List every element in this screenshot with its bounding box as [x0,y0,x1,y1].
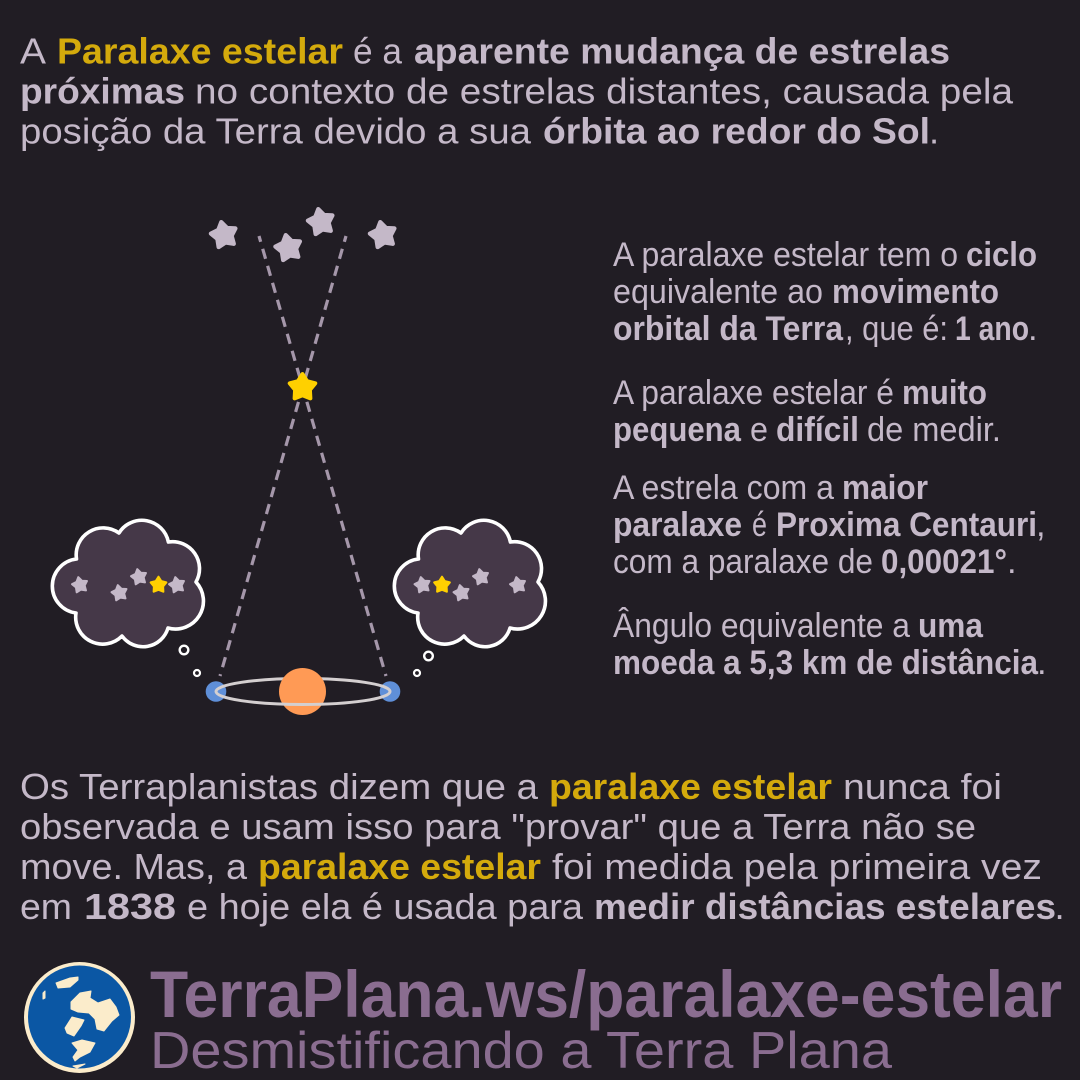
Earth orbit back half [216,679,390,692]
heading: definition of stellar parallax: Paralaxe estelar [57,30,343,72]
text block: flat earth claim: Os Terraplanistas dizem que a [20,766,539,807]
thought cloud left [52,520,203,647]
heading: definition of stellar parallax: . [929,110,939,152]
text block: cycle: orbital da Terra [613,310,844,348]
text block: coin comparison: uma [918,607,984,645]
heading: definition of stellar parallax: posição da Terra devido a sua [20,110,532,152]
text block: small and hard to measure: pequena [613,411,742,449]
near star [290,374,315,398]
text block: small and hard to measure [613,374,1001,449]
text block: Proxima Centauri: é [752,506,767,544]
text block: flat earth claim: e hoje ela é usada para [187,886,584,927]
text block: cycle: . [1028,310,1038,348]
text block: flat earth claim: paralaxe estelar [258,846,541,887]
text block: flat earth claim: paralaxe estelar [549,766,832,807]
text block: coin comparison: moeda a 5,3 km de distância [613,644,1039,682]
thought bubbles right [414,652,433,676]
text block: coin comparison [613,606,1047,682]
text block: flat earth claim: move. Mas, a [20,846,248,887]
logo: flat earth globe [24,962,135,1073]
text block: cycle: ciclo [966,236,1037,274]
heading: definition of stellar parallax [20,30,1014,152]
text block: coin comparison: Ângulo equivalente a [613,606,911,645]
text block: flat earth claim: 1838 [84,886,176,927]
text block: cycle: movimento [832,273,999,311]
heading: definition of stellar parallax: A [20,30,47,72]
heading: definition of stellar parallax: é a [353,30,403,72]
text block: cycle [613,236,1038,348]
diagram: parallax geometry [52,206,545,715]
text block: cycle: 1 ano [955,310,1029,348]
thought bubbles left [180,646,200,676]
heading: definition of stellar parallax: aparente mudança de estrelas [414,30,950,72]
text block: cycle: A paralaxe estelar tem o [613,236,958,274]
text block: cycle: equivalente ao [613,273,823,311]
footer tagline: Desmistificando a Terra Plana [150,1022,892,1080]
text block: small and hard to measure: A paralaxe estelar é [613,374,894,412]
Earth right position [380,681,400,702]
text block: Proxima Centauri: . [1007,543,1017,581]
distant stars [209,206,397,261]
text block: Proxima Centauri: A estrela com a [613,469,835,507]
text block: cycle: , que é: [845,310,948,348]
heading: definition of stellar parallax: próximas [20,70,185,112]
Earth left position [206,681,226,702]
text block: Proxima Centauri: maior [842,469,928,507]
text block: small and hard to measure: e [750,411,768,449]
Sun [279,668,326,715]
text block: flat earth claim: foi medida pela primeira vez [552,846,1042,887]
text block: Proxima Centauri: paralaxe [613,506,742,544]
text block: flat earth claim: medir distâncias estelares [594,886,1056,927]
text block: small and hard to measure: muito [902,374,987,412]
text block: Proxima Centauri [613,469,1046,581]
text block: Proxima Centauri: Proxima Centauri [776,506,1037,544]
text block: flat earth claim: observada e usam isso para "provar" que a Terra não se [20,806,976,847]
text block: small and hard to measure: difícil [776,411,859,449]
text block: flat earth claim: em [20,886,72,927]
thought cloud right [394,520,545,647]
text block: small and hard to measure: de medir. [867,411,1001,449]
text block: flat earth claim: nunca foi [843,766,1002,807]
Earth orbit front half [216,692,390,705]
heading: definition of stellar parallax: órbita ao redor do Sol [543,110,930,152]
text block: Proxima Centauri: , [1036,506,1046,544]
text block: coin comparison: . [1037,644,1047,682]
text block: flat earth claim: . [1054,886,1065,927]
heading: definition of stellar parallax: no contexto de estrelas distantes, causada pela [195,70,1014,112]
text block: flat earth claim [20,766,1065,927]
text block: Proxima Centauri: com a paralaxe de [613,543,873,581]
sight lines: dashed lines from Earth through the near star [220,236,386,676]
text block: Proxima Centauri: 0,00021° [881,543,1007,581]
